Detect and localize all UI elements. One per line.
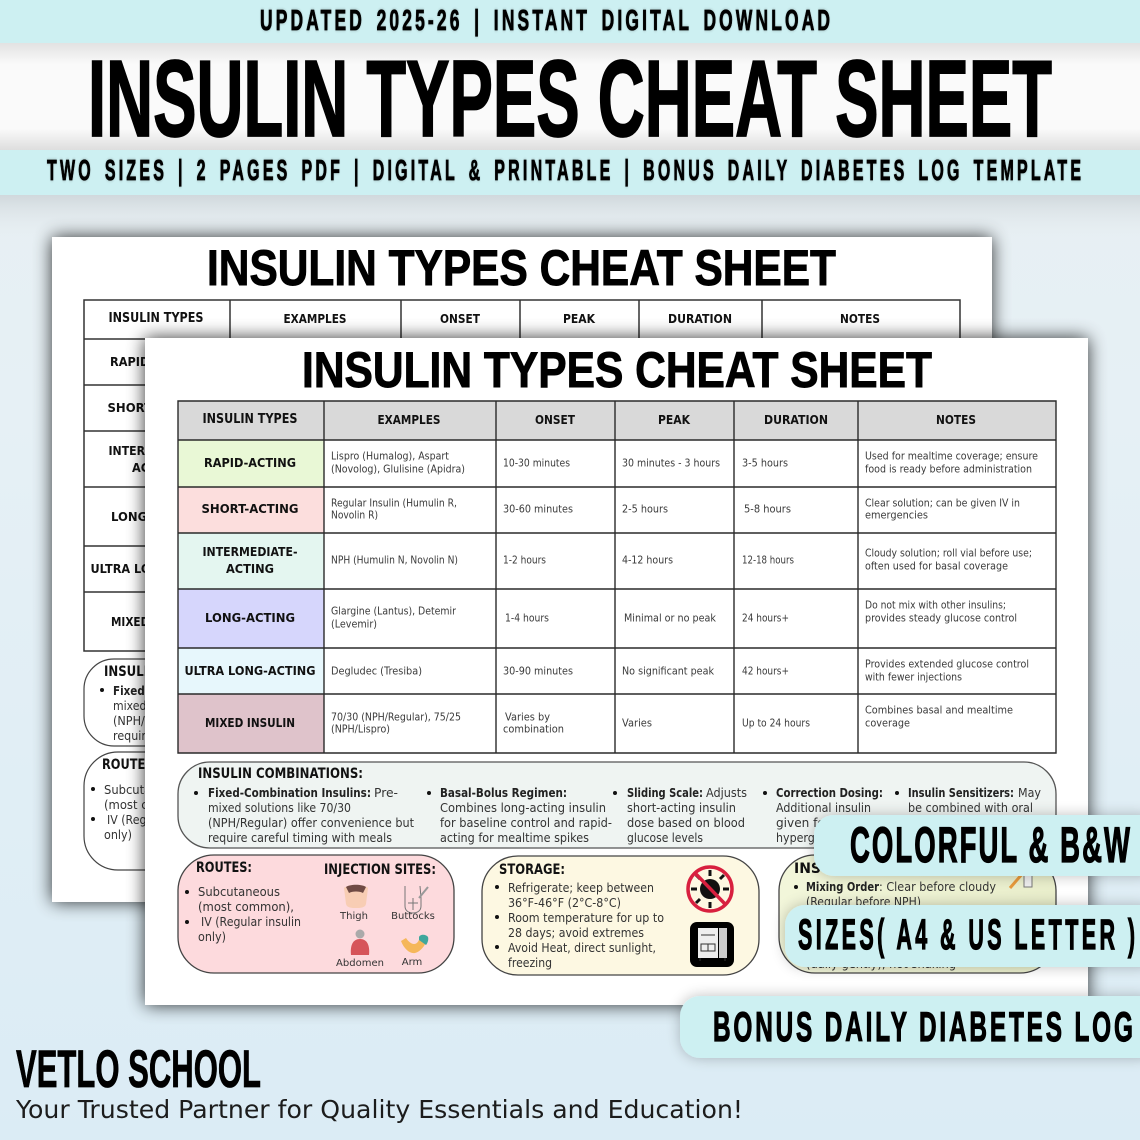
table header row: ONSET xyxy=(535,413,576,427)
subtitle band: product details: TWO SIZES | 2 PAGES PDF | DIGITAL & PRINTABLE | BONUS DAILY DIABETES LOG TEMPLATE xyxy=(47,154,1081,186)
row: short-acting: Clear solution; can be given IV in xyxy=(865,497,1020,509)
row: rapid-acting: food is ready before administration xyxy=(865,463,1032,475)
combination: fixed: Pre- xyxy=(374,786,398,800)
combination: insulin sensitizers: be combined with oral xyxy=(908,801,1033,815)
routes list: Subcutaneous xyxy=(198,885,280,899)
panel: routes and injection sites xyxy=(178,855,454,973)
row: long-acting: provides steady glucose control xyxy=(865,612,1017,624)
icon: abdomen xyxy=(336,930,384,969)
tips list: (Regular before NPH) xyxy=(806,895,921,909)
back sheet table: PEAK xyxy=(563,312,596,326)
table header row: INSULIN TYPES xyxy=(202,412,298,427)
back sheet table: ACTING xyxy=(132,461,180,475)
back sheet table: ONSET xyxy=(440,312,481,326)
combination: correction dosing xyxy=(763,786,883,845)
combination: sliding scale: short-acting insulin xyxy=(627,801,736,815)
row: mixed insulin: Combines basal and mealtime xyxy=(865,704,1013,716)
back sheet table: NOTES xyxy=(840,312,880,326)
row: intermediate-acting: Cloudy solution; roll vial before use; xyxy=(865,547,1032,559)
table header row: DURATION xyxy=(764,413,828,427)
row: intermediate-acting: 1-2 hours xyxy=(503,554,546,566)
back sheet: black and white version xyxy=(52,237,992,902)
combination: basal-bolus: for baseline control and rapid- xyxy=(440,816,612,830)
routes list: (most common), xyxy=(198,900,294,914)
back sheet table xyxy=(84,300,960,651)
icon: thigh: Thigh xyxy=(339,911,368,922)
back sheet routes panel: Subcutaneous xyxy=(104,783,186,797)
combination: sliding scale: Sliding Scale: xyxy=(627,786,703,800)
row: short-acting: 2-5 hours xyxy=(622,503,668,515)
combination: basal-bolus: Combines long-acting insulin xyxy=(440,801,606,815)
row: long-acting: 1-4 hours xyxy=(505,612,549,624)
row: rapid-acting: 30 minutes - 3 hours xyxy=(622,457,720,469)
row: mixed insulin: combination xyxy=(503,723,564,735)
row: ultra long-acting: ULTRA LONG-ACTING xyxy=(184,664,316,678)
row: mixed insulin: Varies by xyxy=(505,711,550,723)
tips list: (daily gently), not shaking xyxy=(806,957,956,971)
badge: bonus log: BONUS DAILY DIABETES LOG xyxy=(713,1004,1133,1051)
icon: no sunlight xyxy=(688,867,732,911)
back sheet title: INSULIN TYPES CHEAT SHEET xyxy=(207,240,836,296)
combination: insulin sensitizers: Insulin Sensitizers: xyxy=(908,786,1014,800)
back sheet routes panel xyxy=(84,752,384,870)
brand name: VETLO SCHOOL xyxy=(16,1040,261,1099)
row: short-acting: SHORT-ACTING xyxy=(202,502,298,516)
table header row: PEAK xyxy=(658,413,691,427)
row: rapid-acting: 3-5 hours xyxy=(742,457,788,469)
row: mixed insulin: MIXED INSULIN xyxy=(205,716,295,730)
combination: basal-bolus xyxy=(427,786,612,845)
row: short-acting: Novolin R) xyxy=(331,509,378,521)
combination: basal-bolus: acting for mealtime spikes xyxy=(440,831,589,845)
combination: correction dosing: Correction Dosing: xyxy=(776,786,883,800)
combination: fixed: Fixed-Combination Insulins: xyxy=(208,786,371,800)
row: intermediate-acting: 12-18 hours xyxy=(742,554,794,566)
row: rapid-acting: Used for mealtime coverage; ensure xyxy=(865,450,1038,462)
storage list: 36°F-46°F (2°C-8°C) xyxy=(508,896,621,910)
back sheet table: LONG-ACTING xyxy=(111,510,201,524)
icon: abdomen: Abdomen xyxy=(336,958,384,969)
storage list: Refrigerate; keep between xyxy=(508,881,654,895)
row: rapid-acting: 10-30 minutes xyxy=(503,457,570,469)
back sheet routes panel: IV (Regular insulin xyxy=(107,813,207,827)
combination: basal-bolus: Basal-Bolus Regimen: xyxy=(440,786,567,800)
storage list xyxy=(495,881,664,970)
row: intermediate-acting: ACTING xyxy=(226,562,274,576)
combination: fixed: mixed solutions like 70/30 xyxy=(208,801,351,815)
row: intermediate-acting: often used for basal coverage xyxy=(865,560,1008,572)
routes list: only) xyxy=(198,930,226,944)
back sheet routes panel: ROUTES: xyxy=(102,757,158,773)
combination: fixed: (NPH/Regular) offer convenience but xyxy=(208,816,414,830)
table header row: NOTES xyxy=(936,413,976,427)
row: long-acting: Glargine (Lantus), Detemir xyxy=(331,605,457,617)
combination: sliding scale: Adjusts xyxy=(706,786,747,800)
row: long-acting: LONG-ACTING xyxy=(205,611,295,625)
combination: fixed xyxy=(194,786,414,845)
storage list: 28 days; avoid extremes xyxy=(508,926,644,940)
storage list: freezing xyxy=(508,956,552,970)
row: short-acting xyxy=(202,497,1020,521)
row: mixed insulin: 70/30 (NPH/Regular), 75/25 xyxy=(331,711,461,723)
row: rapid-acting: Lispro (Humalog), Aspart xyxy=(331,450,449,462)
icon: buttocks: Buttocks xyxy=(391,911,435,922)
front sheet title: INSULIN TYPES CHEAT SHEET xyxy=(302,342,932,398)
row: rapid-acting: (Novolog), Glulisine (Apidra) xyxy=(331,463,465,475)
back sheet combinations panel: (NPH/Regular) offer convenience but xyxy=(113,714,319,728)
icon: arm: Arm xyxy=(402,957,422,968)
combination: fixed: require careful timing with meals xyxy=(208,831,392,845)
row: intermediate-acting xyxy=(202,545,1032,576)
back sheet table: INSULIN TYPES xyxy=(108,311,204,326)
row: rapid-acting xyxy=(204,450,1038,475)
combination: insulin sensitizers xyxy=(895,786,1041,815)
injection sites heading: INJECTION SITES: xyxy=(324,862,436,878)
panel: storage xyxy=(482,856,759,975)
storage heading: STORAGE: xyxy=(499,862,565,878)
row: ultra long-acting: with fewer injections xyxy=(865,671,962,683)
storage list: Avoid Heat, direct sunlight, xyxy=(508,941,656,955)
icon: buttocks xyxy=(391,886,435,922)
back sheet table: MIXED INSULIN xyxy=(111,615,201,629)
row: long-acting: Do not mix with other insulins; xyxy=(865,599,1006,611)
row: ultra long-acting: Provides extended glucose control xyxy=(865,658,1029,670)
row: long-acting: Minimal or no peak xyxy=(624,612,717,624)
back sheet combinations panel: mixed solutions like 70/30 xyxy=(113,699,256,713)
panel: insulin combinations xyxy=(178,762,1056,848)
row: long-acting xyxy=(205,599,1017,630)
table header row: EXAMPLES xyxy=(378,413,440,427)
combination: sliding scale: glucose levels xyxy=(627,831,703,845)
tips list xyxy=(794,880,996,971)
back sheet combinations panel: require careful timing with meals xyxy=(113,729,297,743)
icon: thigh xyxy=(339,885,368,922)
icon: refrigerator xyxy=(690,922,734,967)
row: intermediate-acting: 4-12 hours xyxy=(622,554,673,566)
panel: insulin administration tips xyxy=(779,855,1056,973)
row: ultra long-acting: 30-90 minutes xyxy=(503,665,573,677)
row: mixed insulin: Varies xyxy=(622,717,652,729)
combinations heading: INSULIN COMBINATIONS: xyxy=(198,766,363,782)
back sheet combinations panel: INSULIN COMBINATIONS: xyxy=(104,664,269,680)
routes list xyxy=(185,885,301,944)
row: short-acting: emergencies xyxy=(865,509,928,521)
row: long-acting: 24 hours+ xyxy=(742,612,789,624)
subtitle band: product details xyxy=(0,150,1140,195)
row: mixed insulin xyxy=(205,704,1013,735)
combination: correction dosing: hyperglycemia xyxy=(776,831,858,845)
tips list: : Clear before cloudy xyxy=(879,880,996,894)
combination: correction dosing: given for high xyxy=(776,816,860,830)
row: short-acting: Regular Insulin (Humulin R, xyxy=(331,497,457,509)
combination: insulin sensitizers: May xyxy=(1018,786,1041,800)
combination: sliding scale xyxy=(613,786,747,845)
back sheet table: SHORT-ACTING xyxy=(108,401,204,415)
badge: bonus log xyxy=(680,996,1140,1058)
row: intermediate-acting: INTERMEDIATE- xyxy=(202,545,298,559)
badge: sizes: SIZES( A4 & US LETTER ) xyxy=(798,911,1135,959)
tips list: Mixing Order xyxy=(806,880,879,894)
row: rapid-acting: RAPID-ACTING xyxy=(204,456,296,470)
back sheet routes panel: only) xyxy=(104,828,132,842)
storage list: Room temperature for up to xyxy=(508,911,664,925)
tips heading: INSULIN xyxy=(794,861,858,877)
back sheet routes panel: (most common), xyxy=(104,798,200,812)
row: ultra long-acting: 42 hours+ xyxy=(742,665,789,677)
row: mixed insulin: Up to 24 hours xyxy=(742,717,810,729)
badge: colorful and black and white: COLORFUL & B&W xyxy=(850,816,1131,873)
combination: correction dosing: Additional insulin xyxy=(776,801,871,815)
row: ultra long-acting: Degludec (Tresiba) xyxy=(331,665,422,677)
back sheet table: RAPID-ACTING xyxy=(110,355,202,369)
row: mixed insulin: coverage xyxy=(865,717,910,729)
row: mixed insulin: (NPH/Lispro) xyxy=(331,723,390,735)
back sheet table: INTERMEDIATE- xyxy=(108,444,204,458)
routes heading: ROUTES: xyxy=(196,860,252,876)
brand tagline: Your Trusted Partner for Quality Essentials and Education! xyxy=(15,1095,743,1124)
top band: update notice xyxy=(0,0,1140,43)
top band: update notice: UPDATED 2025-26 | INSTANT DIGITAL DOWNLOAD xyxy=(260,5,830,37)
row: ultra long-acting: No significant peak xyxy=(622,665,715,677)
combination: sliding scale: dose based on blood xyxy=(627,816,745,830)
table header row xyxy=(202,412,976,427)
back sheet combinations panel: Fixed-Combination Insulins: xyxy=(113,684,276,698)
row: ultra long-acting xyxy=(184,658,1029,683)
icon: syringe and vial xyxy=(1010,873,1032,888)
icon: arm xyxy=(401,935,428,968)
insulin table xyxy=(178,401,1056,753)
back sheet table: EXAMPLES xyxy=(284,312,346,326)
back sheet table: ULTRA LONG-ACTING xyxy=(90,562,222,576)
routes list: IV (Regular insulin xyxy=(201,915,301,929)
row: long-acting: (Levemir) xyxy=(331,618,377,630)
row: short-acting: 5-8 hours xyxy=(744,503,791,515)
row: short-acting: 30-60 minutes xyxy=(503,503,573,515)
row: intermediate-acting: NPH (Humulin N, Novolin N) xyxy=(331,554,458,566)
back sheet table: DURATION xyxy=(668,312,732,326)
back sheet combinations panel xyxy=(84,659,384,746)
